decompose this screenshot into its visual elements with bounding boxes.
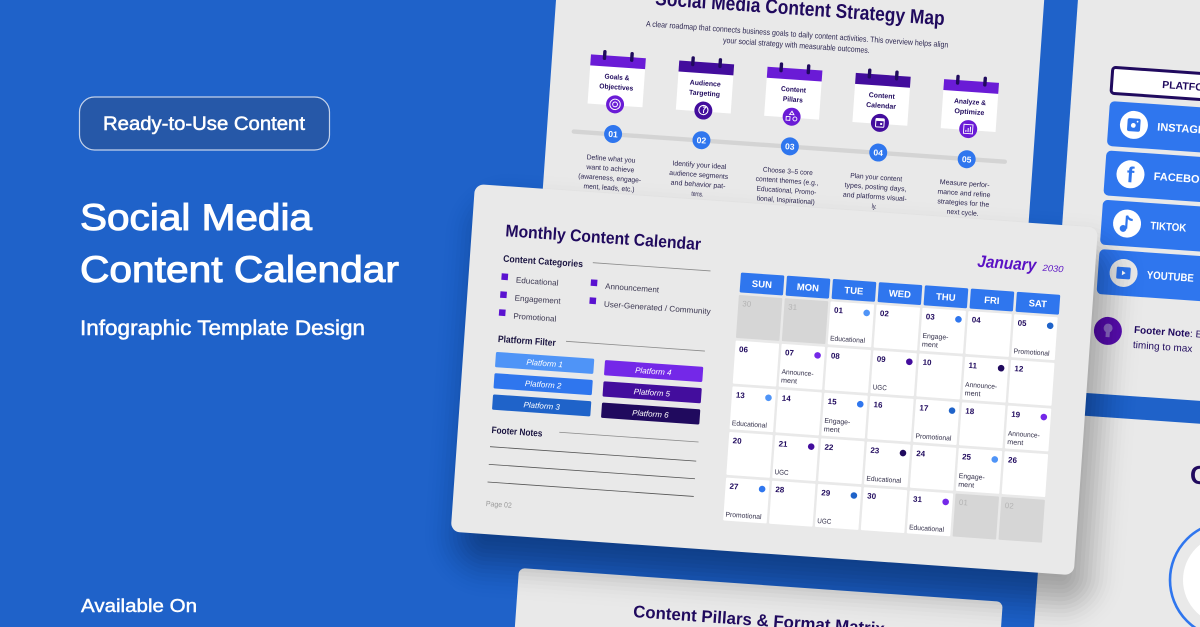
footer note: timing to max: [1133, 340, 1193, 355]
step 4: Calendar: [866, 102, 897, 111]
calendar week 2: 12: [1014, 364, 1024, 374]
step 2: audience segments: [669, 170, 729, 181]
calendar week 3: ment: [1007, 439, 1024, 447]
step 2: Audience: [689, 80, 721, 89]
platform filter: Platform 3: [523, 400, 561, 412]
content categories: Content Categories: [503, 254, 583, 270]
calendar week 4: 22: [824, 443, 834, 452]
calendar week 4: 20: [732, 436, 742, 446]
badge: Ready-to-Use Content: Ready-to-Use Content: [103, 114, 306, 135]
platform: Facebook: f: [1126, 162, 1136, 188]
footer notes: [488, 425, 699, 496]
footer note: [1133, 325, 1200, 356]
calendar week 4: ment: [958, 481, 974, 490]
panel: lower right page: [1028, 413, 1200, 627]
platform: TikTok: [1100, 200, 1200, 258]
step 5: Optimize: [954, 108, 985, 117]
weekday headers: SUN: [751, 279, 772, 291]
panel: content pillars: [505, 568, 1003, 627]
calendar week 1: 01: [834, 306, 844, 315]
calendar week 1: Educational: [830, 335, 866, 345]
step 1: (awareness, engage-: [578, 173, 642, 185]
calendar week 3: 14: [781, 394, 792, 403]
calendar week 3: Engage-: [824, 418, 851, 427]
calendar week 4: Educational: [866, 476, 902, 485]
calendar week 3: Promotional: [915, 433, 952, 443]
step 5: [935, 74, 999, 219]
month label: 2030: [1041, 263, 1064, 274]
calendar week 5: Promotional: [725, 512, 762, 521]
strategy map intro: A clear roadmap that connects business goals to daily content activities. This overview helps align: [646, 19, 949, 49]
platform filter: Platform 2: [525, 379, 562, 391]
step 3: tional, Inspirational): [757, 195, 815, 206]
calendar week 1: 30: [742, 299, 752, 309]
calendar week 1: 02: [880, 309, 890, 319]
calendar week 5: 30: [867, 491, 877, 501]
calendar week 5: UGC: [817, 518, 832, 526]
chart ring: [1170, 522, 1200, 627]
step 4: 04: [873, 147, 884, 158]
calendar week 3: Educational: [732, 420, 767, 430]
calendar week 1: 31: [788, 302, 798, 312]
step 1: want to achieve: [585, 164, 635, 174]
subtitle: Infographic Template Design: [80, 317, 365, 340]
panel: strategy map: [535, 0, 1046, 333]
calendar week 4: 21: [778, 439, 788, 449]
calendar week 2: 08: [831, 351, 841, 361]
calendar week 4: 26: [1008, 455, 1018, 465]
content categories: Promotional: [513, 312, 557, 324]
calendar week 5: Educational: [909, 524, 945, 534]
strategy map intro: your social strategy with measurable outcomes.: [723, 36, 870, 55]
calendar week 2: ment: [781, 377, 797, 385]
calendar week 3: 16: [873, 400, 883, 410]
calendar week 1: 04: [971, 315, 981, 325]
weekday headers: [740, 272, 1060, 315]
step 1: Objectives: [599, 83, 634, 93]
calendar week 3: [730, 386, 1051, 451]
calendar week 2: Announce-: [965, 382, 998, 391]
step 5: strategies for the: [937, 198, 990, 209]
calendar week 3: 18: [965, 407, 975, 416]
calendar week 5: 29: [821, 488, 831, 498]
calendar week 2: 09: [876, 355, 887, 364]
calendar week 5: 28: [775, 485, 785, 495]
weekday headers: SAT: [1028, 298, 1047, 310]
step 2: terns.: [691, 191, 704, 199]
calendar heading: Monthly Content Calendar: [505, 221, 702, 254]
title: Content Calendar: [80, 249, 399, 290]
calendar week 4: Engage-: [959, 473, 986, 482]
calendar week 3: 13: [736, 391, 746, 400]
content categories: [499, 254, 714, 334]
calendar week 1: 05: [1017, 319, 1027, 328]
calendar week 5: 31: [913, 495, 923, 504]
step 3: Choose 3–5 core: [763, 167, 813, 177]
step 1: ment, leads, etc.): [583, 183, 635, 194]
available on label: Available On: [81, 596, 197, 616]
calendar week 2: 07: [785, 348, 795, 358]
step 4: [842, 67, 916, 213]
calendar week 4: UGC: [774, 469, 789, 477]
content categories: Announcement: [605, 282, 660, 295]
calendar week 2: 06: [739, 345, 749, 355]
weekday headers: THU: [936, 292, 956, 304]
content categories: Engagement: [514, 294, 562, 306]
calendar week 1: 03: [926, 312, 936, 322]
calendar week 2: ment: [964, 390, 981, 398]
calendar week 1: ment: [922, 341, 938, 349]
step 2: Targeting: [689, 90, 720, 99]
calendar week 5: 27: [729, 482, 739, 491]
calendar week 4: 23: [870, 446, 880, 455]
platform filter: Platform Filter: [498, 334, 556, 349]
content categories: Educational: [516, 276, 559, 288]
badge: Ready-to-Use Content: [80, 97, 330, 150]
step 4: and platforms visual-: [843, 192, 908, 203]
weekday headers: FRI: [984, 295, 1000, 307]
calendar week 4: [726, 432, 1048, 497]
weekday headers: TUE: [844, 285, 864, 298]
step 4: Plan your content: [850, 173, 902, 183]
title: [80, 197, 399, 290]
weekday headers: MON: [796, 282, 819, 294]
platform filter: Platform 4: [635, 366, 672, 377]
icon: footer lightbulb: [1093, 316, 1123, 346]
step 3: 03: [785, 141, 795, 152]
step 3: Educational, Promo-: [756, 186, 817, 197]
step 3: [754, 61, 827, 207]
step 4: Content: [869, 92, 896, 101]
calendar week 2: [733, 341, 1055, 406]
calendar week 1: [736, 295, 1058, 360]
panel: platforms: [1051, 0, 1200, 411]
step 1: 01: [608, 129, 618, 139]
panel: monthly content calendar: [451, 184, 1098, 575]
platform filter: Platform 1: [526, 358, 563, 369]
platform: YouTube: YOUTUBE: [1146, 270, 1194, 285]
title: Social Media: [80, 197, 312, 238]
step 1: Goals &: [604, 74, 630, 82]
step 5: Analyze &: [954, 98, 986, 107]
calendar week 3: 15: [827, 397, 837, 407]
platform: TikTok: TIKTOK: [1150, 220, 1187, 235]
weekday headers: WED: [888, 288, 911, 301]
calendar week 2: 11: [968, 361, 978, 371]
calendar week 1: Promotional: [1013, 348, 1050, 358]
calendar week 4: 25: [962, 452, 972, 462]
page number: Page 02: [486, 499, 512, 510]
calendar week 5: [723, 478, 1045, 543]
step 3: Content: [781, 86, 807, 95]
step 2: [668, 55, 737, 200]
footer notes: Footer Notes: [491, 425, 543, 440]
step 4: types, posting days,: [844, 182, 907, 193]
step 4: ly.: [871, 203, 877, 211]
platform filter: Platform 6: [632, 408, 669, 420]
step 5: mance and refine: [937, 189, 991, 199]
step 5: Measure perfor-: [939, 179, 990, 190]
calendar week 5: 02: [1005, 501, 1015, 511]
step 5: 05: [962, 154, 972, 165]
step 2: Identify your ideal: [672, 160, 727, 171]
month label: January: [977, 252, 1038, 275]
calendar week 2: Announce-: [781, 369, 814, 378]
platform filter: [492, 334, 705, 425]
step 1: Define what you: [586, 154, 636, 165]
calendar week 5: 01: [959, 498, 969, 507]
calendar week 3: ment: [823, 426, 840, 434]
calendar week 2: UGC: [873, 384, 887, 392]
timeline bar: [574, 132, 1005, 162]
step 3: Pillars: [783, 96, 803, 104]
content categories: User-Generated / Community: [604, 300, 711, 316]
step 2: 02: [696, 135, 707, 146]
step 3: content themes (e.g.,: [755, 176, 819, 187]
calendar card shadow: [420, 169, 1149, 627]
step 5: next cycle.: [946, 209, 979, 218]
calendar week 1: Engage-: [922, 333, 949, 342]
calendar week 3: 19: [1011, 410, 1021, 419]
platform table heading: [1111, 67, 1200, 107]
calendar week 2: 10: [922, 358, 932, 367]
step 2: and behavior pat-: [670, 180, 726, 191]
step 1: [577, 49, 651, 194]
calendar week 3: 17: [919, 403, 929, 413]
calendar week 4: 24: [916, 449, 926, 459]
platform: Facebook: [1103, 150, 1200, 209]
platform: Instagram: [1107, 101, 1200, 160]
platform: YouTube: [1096, 249, 1200, 308]
platform filter: Platform 5: [633, 387, 671, 399]
calendar week 3: Announce-: [1008, 431, 1041, 440]
